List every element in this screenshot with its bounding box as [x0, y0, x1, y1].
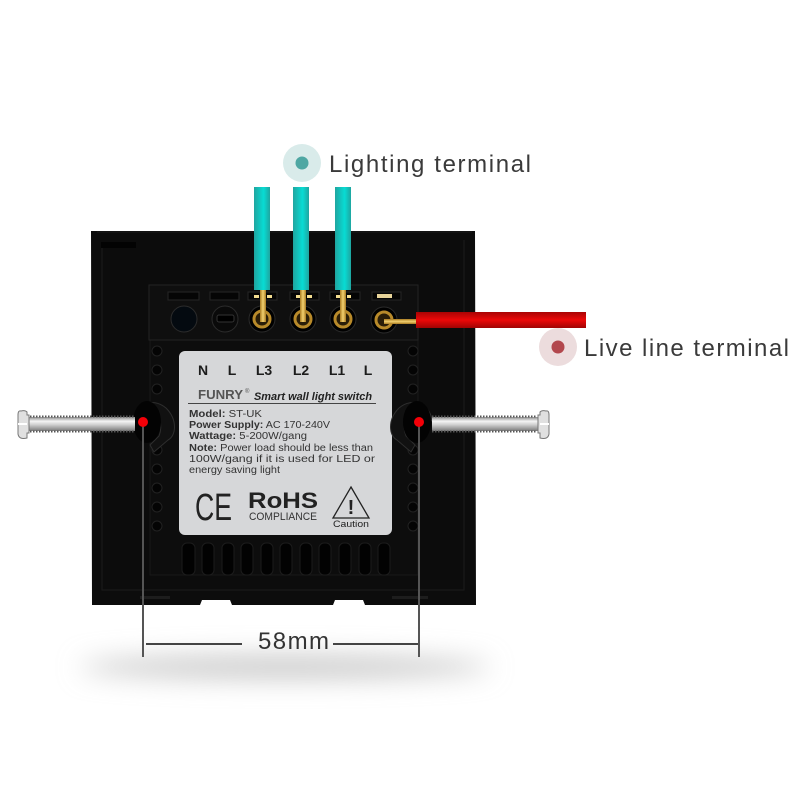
specification text: Wattage: 5-200W/gang: [189, 431, 307, 442]
specification text: Note: Power load should be less than: [189, 443, 373, 454]
terminal names: N: [198, 362, 208, 378]
brand line: Smart wall light switch: [254, 391, 372, 403]
specification text: Power Supply: AC 170-240V: [189, 420, 330, 431]
live wire: [384, 312, 586, 328]
terminal names: L3: [256, 362, 272, 378]
lighting wires: [249, 187, 397, 333]
brand line: FUNRY: [198, 387, 243, 402]
terminal names: L: [228, 362, 237, 378]
lighting terminal callout: [283, 144, 531, 182]
RoHS mark: COMPLIANCE: [249, 511, 317, 523]
left screw: [18, 411, 135, 438]
caution icon: Caution: [333, 519, 369, 530]
right mounting slot: [390, 401, 432, 452]
specification text: 100W/gang if it is used for LED or: [189, 454, 376, 465]
terminal names: L: [364, 362, 373, 378]
specification text: energy saving light: [189, 465, 280, 476]
specification text: [189, 409, 376, 476]
live line terminal callout: Live line terminal: [584, 335, 789, 362]
brand line: [198, 387, 372, 403]
caution icon: [333, 487, 369, 530]
specification text: Model: ST-UK: [189, 409, 262, 420]
panel: specification label: [179, 351, 392, 535]
right screw: [432, 411, 549, 438]
terminal block: [149, 285, 418, 340]
bottom vent slots: [182, 543, 390, 575]
ground shadow: [80, 656, 490, 678]
panel: switch back body: [91, 231, 476, 605]
lighting terminal callout: Lighting terminal: [329, 151, 531, 178]
live line terminal callout: [539, 328, 789, 366]
dimension: 58mm: 58mm: [258, 628, 329, 655]
RoHS mark: RoHS: [248, 488, 318, 513]
ventilation holes: [152, 346, 418, 531]
caution icon: !: [348, 497, 354, 519]
terminal names: L1: [329, 362, 345, 378]
brand line: ®: [245, 388, 250, 395]
terminal names: L2: [293, 362, 309, 378]
RoHS mark: [248, 488, 318, 523]
CE mark: CE: [195, 487, 232, 529]
left mounting slot: [133, 401, 174, 452]
dimension: 58mm: [138, 417, 424, 657]
